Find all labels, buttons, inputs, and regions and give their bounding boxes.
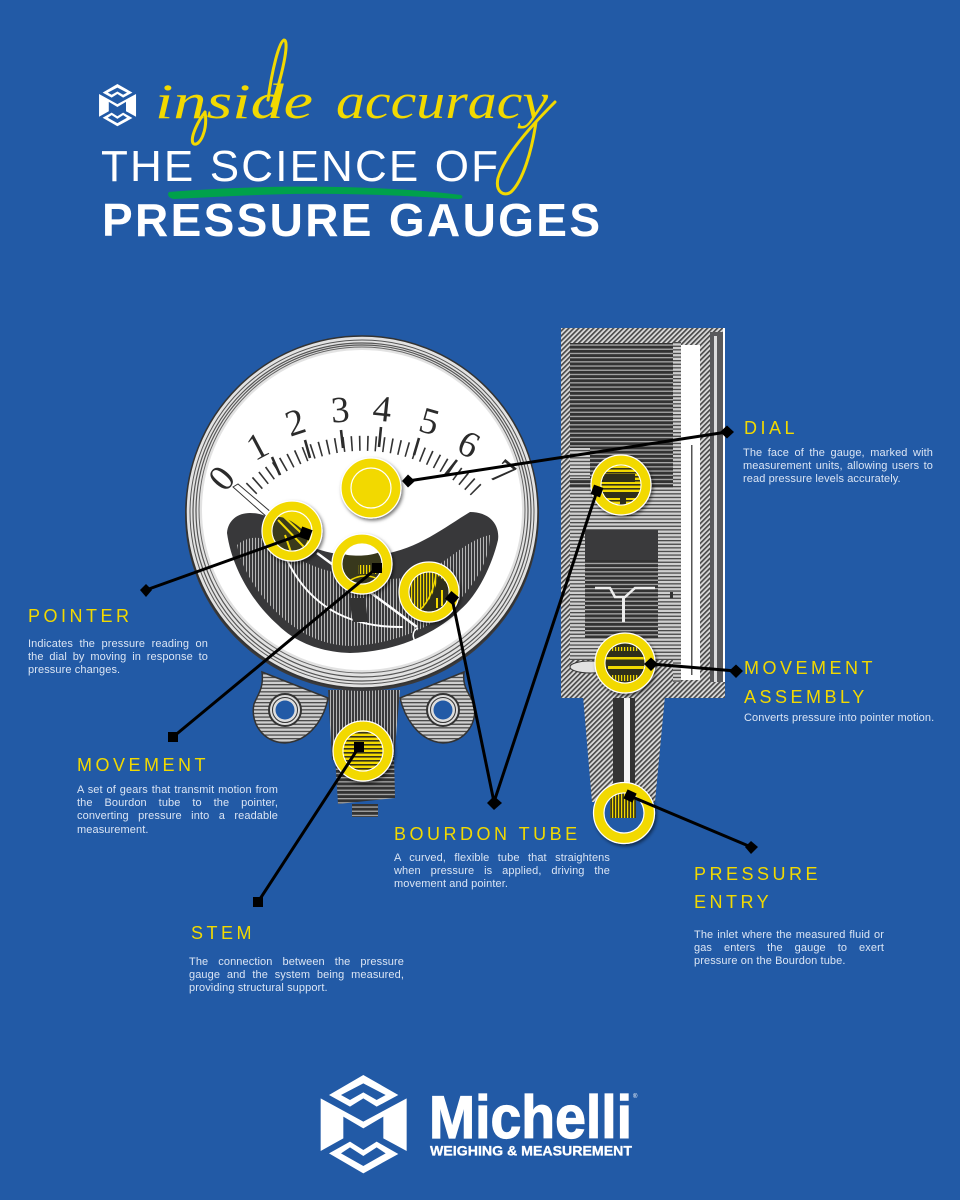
label: pressure entry: gas enters the gauge to exert xyxy=(694,942,884,954)
label: movement assembly xyxy=(744,658,934,724)
callout ring: bourdon tube xyxy=(399,562,459,622)
label: movement: the Bourdon tube to the pointer, xyxy=(77,797,278,809)
label: movement: measurement. xyxy=(77,824,149,836)
label: pointer: Indicates the pressure reading on xyxy=(28,638,208,650)
gauge window xyxy=(227,512,498,653)
label: pressure entry: pressure on the Bourdon tube. xyxy=(694,955,846,967)
label: stem: The connection between the pressure xyxy=(189,956,404,968)
label: pressure entry xyxy=(694,864,884,967)
footer wordmark: WEIGHING & MEASUREMENT xyxy=(430,1142,632,1158)
label: pointer xyxy=(28,606,208,676)
label: stem: gauge and the system being measured, xyxy=(189,969,404,981)
gauge numerals: 3 xyxy=(330,389,351,432)
label: pressure entry: The inlet where the measured fluid or xyxy=(694,928,884,940)
title script: inside accuracy: accuracy xyxy=(336,73,549,129)
gauge numerals: 7 xyxy=(482,452,523,495)
green underline stroke xyxy=(168,187,462,199)
gauge numerals: 0 xyxy=(201,458,244,499)
label: movement assembly: ASSEMBLY xyxy=(744,687,868,707)
gauge numerals xyxy=(201,388,523,499)
callout ring: stem xyxy=(333,721,393,781)
gauge numerals: 2 xyxy=(280,401,311,445)
illustration: front view of gauge xyxy=(185,336,539,817)
label: pressure entry: PRESSURE xyxy=(694,864,821,884)
leader lines: bourdon tube xyxy=(445,485,603,810)
gauge numerals: 6 xyxy=(451,422,486,467)
leader line: pointer xyxy=(140,526,313,597)
label: bourdon tube xyxy=(394,824,610,890)
gauge numerals: 5 xyxy=(415,400,444,444)
label: pointer: pressure changes. xyxy=(28,664,120,676)
side view case xyxy=(561,328,725,698)
label: movement: MOVEMENT xyxy=(77,755,209,775)
leader line: stem xyxy=(253,742,364,907)
label: dial: measurement units, allowing users to xyxy=(743,460,933,472)
footer wordmark: Michelli xyxy=(429,1084,632,1151)
label: bourdon tube: movement and pointer. xyxy=(394,878,508,890)
label: stem: STEM xyxy=(191,923,255,943)
gauge needle xyxy=(233,484,272,518)
label: movement: converting pressure into a readable xyxy=(77,810,278,822)
gauge numerals: 1 xyxy=(240,424,275,469)
side view tapered stem xyxy=(583,696,665,802)
leader line: pressure entry xyxy=(623,789,758,854)
leader line: dial xyxy=(402,426,734,488)
icon: small Michelli mark xyxy=(99,84,136,126)
label: movement: A set of gears that transmit motion from xyxy=(77,784,278,796)
label: pressure entry: ENTRY xyxy=(694,892,772,912)
callout ring: pointer xyxy=(262,501,322,561)
title script: inside accuracy: inside xyxy=(155,73,313,129)
label: pointer: the dial by moving in response to xyxy=(28,651,208,663)
title line: PRESSURE GAUGES: PRESSURE GAUGES xyxy=(102,194,600,246)
label: movement assembly: Converts pressure into pointer motion. xyxy=(744,712,934,724)
illustration: side section view of gauge xyxy=(561,328,725,802)
label: dial: read pressure levels accurately. xyxy=(743,473,901,485)
footer wordmark: ® xyxy=(633,1093,638,1100)
title line: THE SCIENCE OF: THE SCIENCE OF xyxy=(101,142,498,191)
label: movement assembly: MOVEMENT xyxy=(744,658,876,678)
label: stem xyxy=(189,923,404,994)
gauge stem xyxy=(328,690,400,817)
callout ring: bourdon tube side view xyxy=(591,455,651,515)
leader line: movement assembly xyxy=(644,658,743,678)
label: pointer: POINTER xyxy=(28,606,133,626)
callout ring: movement assembly xyxy=(595,633,655,693)
title script: inside accuracy xyxy=(155,40,555,194)
label: dial: DIAL xyxy=(744,418,798,438)
label: dial: The face of the gauge, marked with xyxy=(743,446,933,458)
label: dial xyxy=(743,418,933,485)
gauge tick scale xyxy=(251,427,477,491)
label: stem: providing structural support. xyxy=(189,982,328,994)
callout ring: pressure entry xyxy=(594,782,654,844)
gauge numerals: 4 xyxy=(371,388,394,431)
gauge mounting ears xyxy=(253,672,475,743)
callout ring: dial xyxy=(341,458,401,518)
label: bourdon tube: when pressure is applied, driving the xyxy=(394,865,610,877)
label: movement xyxy=(77,755,278,836)
footer logo mark xyxy=(321,1075,407,1173)
label: bourdon tube: A curved, flexible tube that straightens xyxy=(394,852,610,864)
leader line: movement xyxy=(168,563,382,742)
callout ring: movement xyxy=(332,534,392,594)
label: bourdon tube: BOURDON TUBE xyxy=(394,824,581,844)
gauge rim and face xyxy=(185,336,539,691)
